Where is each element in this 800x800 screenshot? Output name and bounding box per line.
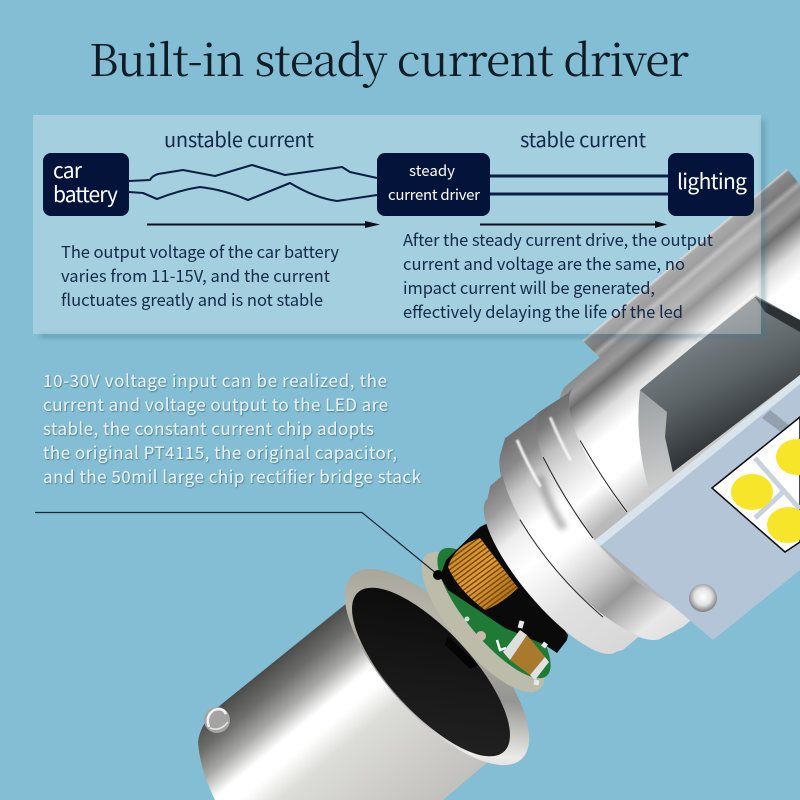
text: driver description: After the steady current drive, the output <box>403 227 713 251</box>
text: driver description: impact current will be generated, <box>403 275 655 299</box>
callout leader line <box>35 512 443 580</box>
arrow: battery to driver <box>147 221 380 228</box>
LED array <box>712 417 800 552</box>
text: driver features <box>43 367 422 488</box>
text: battery description <box>61 239 339 311</box>
unstable current wires <box>129 165 377 201</box>
bulb body <box>426 150 800 689</box>
box: steady current driver: steady <box>409 160 455 181</box>
title: Built-in steady current driver <box>89 25 690 89</box>
icon: bayonet pin <box>204 707 230 733</box>
box: steady current driver: current driver <box>388 184 480 205</box>
front collar <box>460 474 640 673</box>
heat sink top strip <box>582 169 800 364</box>
LED plate <box>595 375 800 640</box>
cylinder body <box>532 169 800 613</box>
copper coil <box>448 538 518 610</box>
icon: rivet <box>689 584 717 612</box>
text: driver features: 10-30V voltage input can be realized, the <box>43 367 387 392</box>
text: driver features: and the 50mil large chip rectifier bridge stack <box>43 463 422 488</box>
label: stable current: stable current <box>520 124 646 153</box>
base metal cup <box>198 541 558 800</box>
box: car battery: car <box>53 155 83 185</box>
box: car battery: battery <box>53 179 118 209</box>
arrow: driver to lighting <box>480 221 667 228</box>
text: driver description: current and voltage are the same, no <box>403 251 685 275</box>
text: driver description: effectively delaying the life of the led <box>403 299 683 323</box>
circuit board with coil mount <box>403 523 568 709</box>
box: lighting <box>668 153 754 216</box>
LED cavity <box>638 293 800 493</box>
text: battery description: The output voltage of the car battery <box>61 239 339 263</box>
text: battery description: varies from 11-15V, and the current <box>61 263 330 287</box>
text: driver description <box>403 227 713 323</box>
text: driver features: the original PT4115, the original capacitor, <box>43 439 397 464</box>
ring B <box>505 382 741 638</box>
box: steady current driver <box>377 153 490 216</box>
box: lighting: lighting <box>677 166 747 196</box>
capacitor <box>503 621 549 685</box>
label: unstable current: unstable current <box>164 124 314 153</box>
stable current wires <box>490 176 668 194</box>
box: car battery <box>43 153 129 216</box>
text: driver features: current and voltage output to the LED are <box>43 391 388 416</box>
ring A <box>469 408 708 667</box>
text: battery description: fluctuates greatly and is not stable <box>61 287 323 311</box>
text: driver features: stable, the constant current chip adopts <box>43 415 374 440</box>
panel: current diagram <box>33 115 765 338</box>
